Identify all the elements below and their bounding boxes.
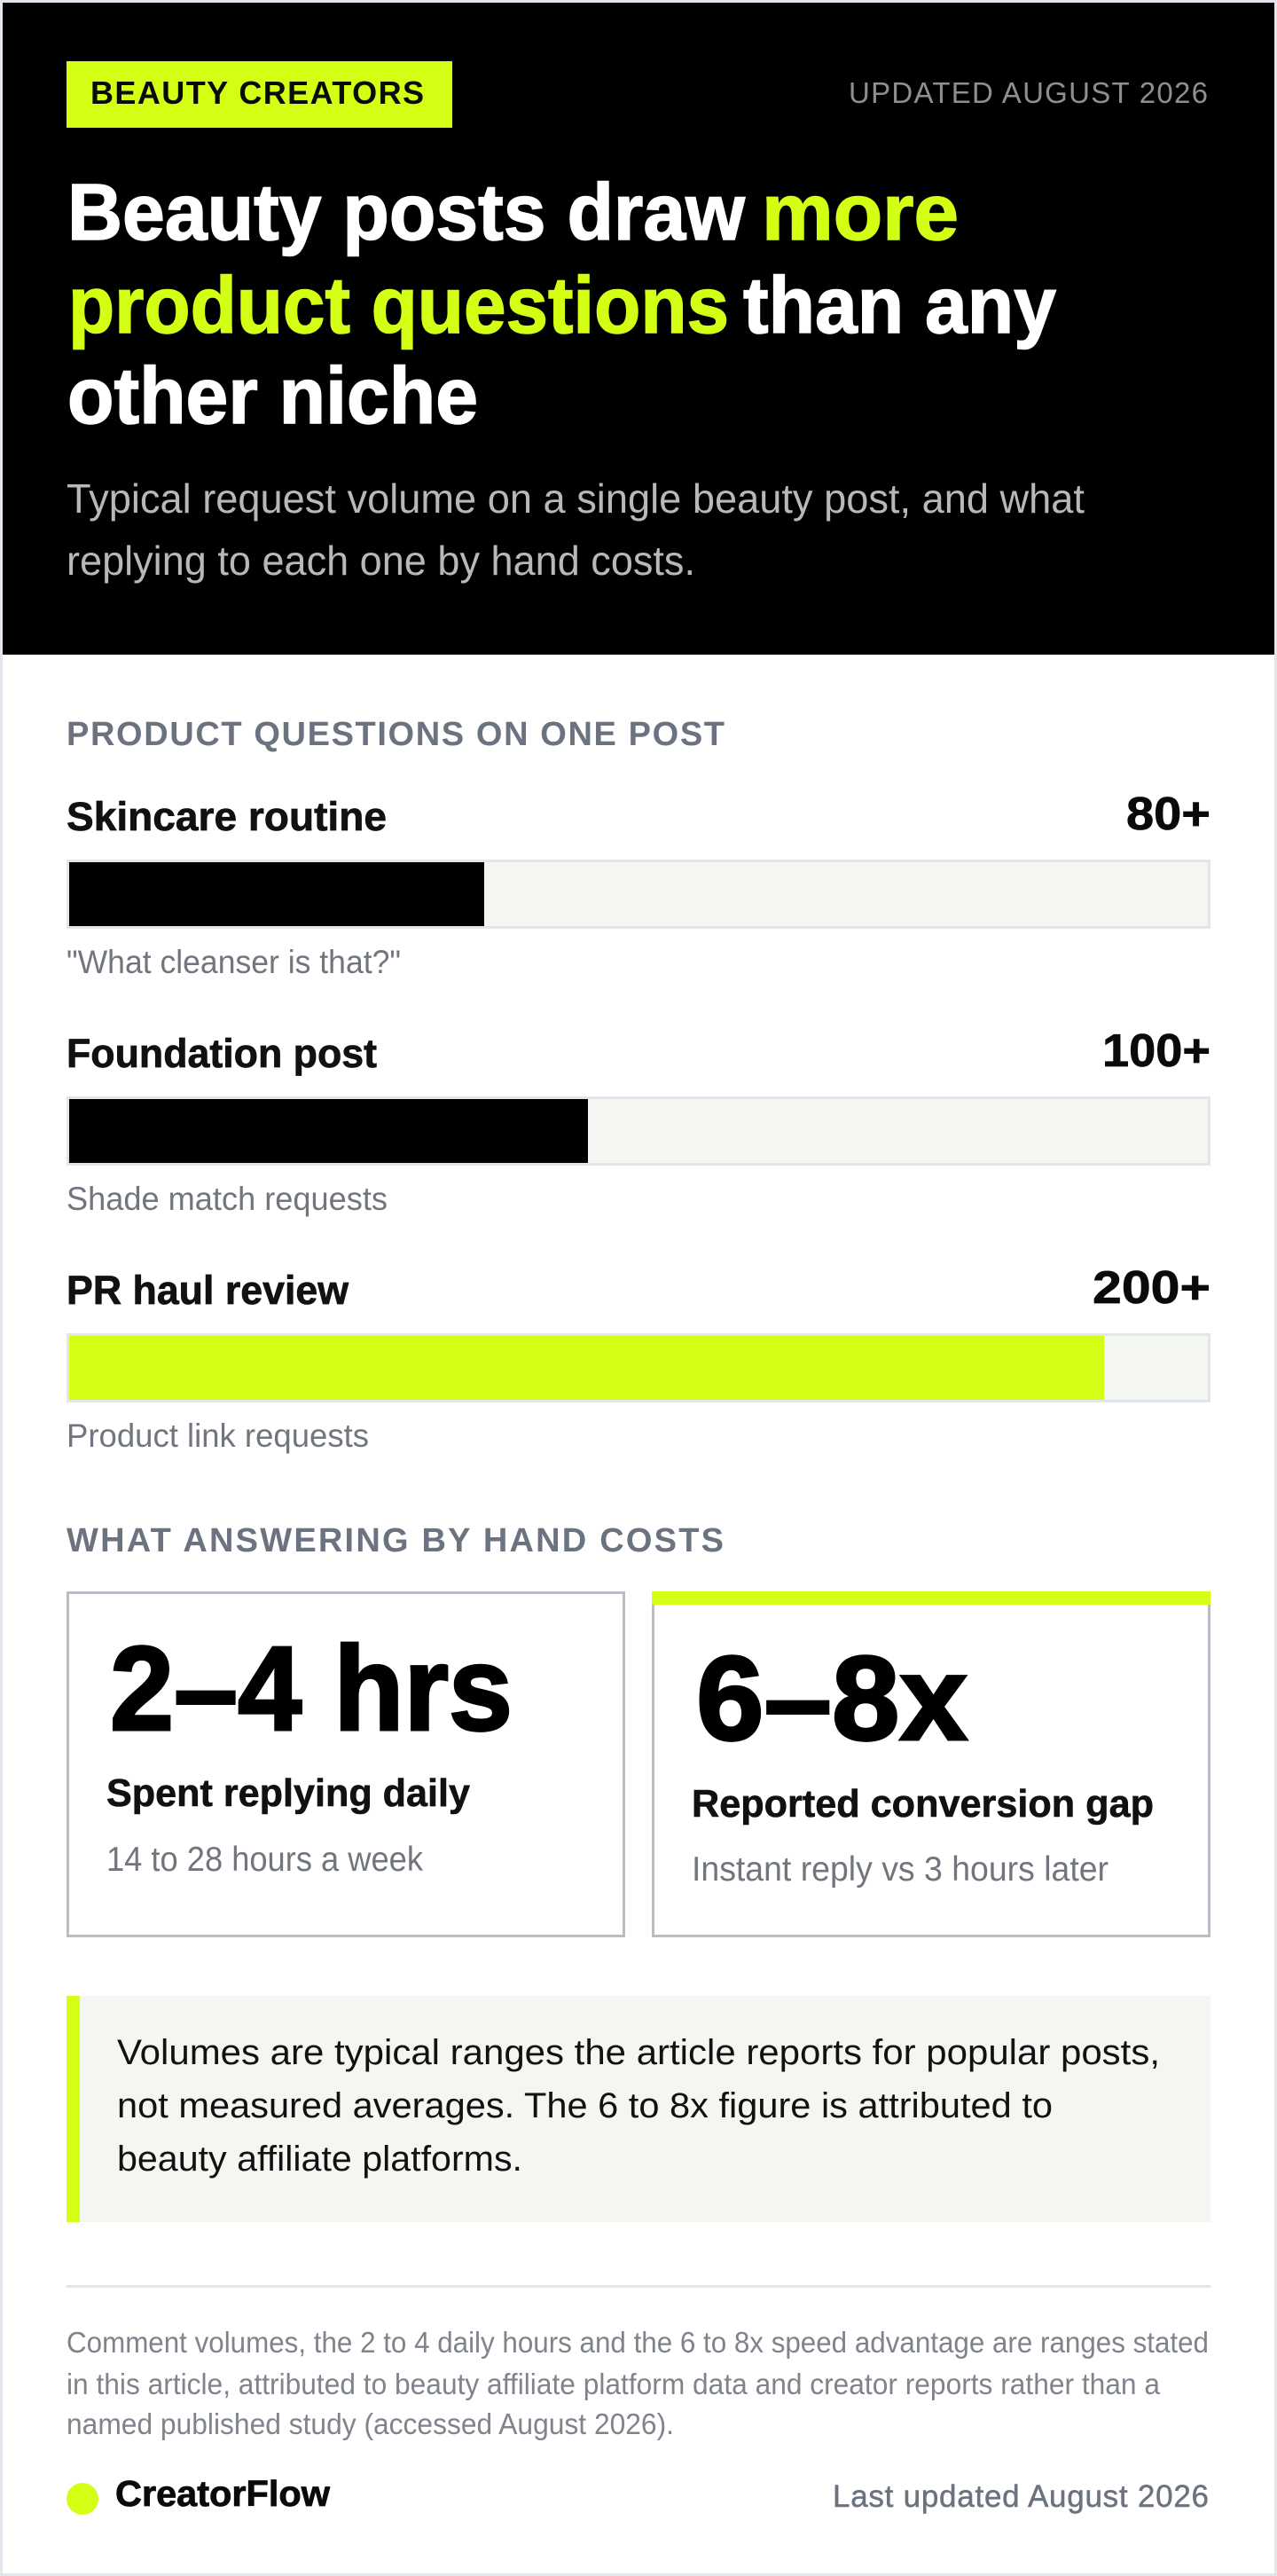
category tag: BEAUTY CREATORS bbox=[90, 75, 424, 111]
bar row: skincare routine bbox=[67, 789, 1210, 980]
stat card: hours: 14 to 28 hours a week bbox=[106, 1841, 423, 1879]
callout note: not measured averages. The 6 to 8x figure is attributed to bbox=[117, 2086, 1053, 2125]
stat card: conversion gap: 6–8x bbox=[696, 1631, 968, 1765]
stat card: hours: Spent replying daily bbox=[106, 1771, 471, 1815]
bar row: foundation post: Foundation post bbox=[67, 1031, 377, 1076]
stat card: conversion gap: Instant reply vs 3 hours later bbox=[692, 1850, 1109, 1889]
header panel bbox=[3, 3, 1274, 655]
title: than any bbox=[743, 262, 1056, 350]
bar row: skincare routine: "What cleanser is that?" bbox=[67, 944, 401, 980]
section heading: product questions: PRODUCT QUESTIONS ON ONE POST bbox=[67, 716, 725, 753]
bar row: foundation post: Shade match requests bbox=[67, 1181, 388, 1217]
callout note bbox=[67, 1996, 1210, 2222]
bar row: foundation post bbox=[67, 1025, 1210, 1217]
title: more bbox=[762, 169, 959, 257]
stat card: conversion gap: Reported conversion gap bbox=[692, 1782, 1154, 1826]
brand logo: CreatorFlow bbox=[115, 2473, 330, 2514]
bar row: PR haul review bbox=[67, 1262, 1210, 1454]
title: product questions bbox=[68, 262, 729, 350]
source footnote: named published study (accessed August 2026). bbox=[67, 2407, 674, 2440]
stat card: conversion gap bbox=[652, 1591, 1210, 1936]
callout note: beauty affiliate platforms. bbox=[117, 2140, 522, 2179]
bar row: skincare routine: Skincare routine bbox=[67, 794, 387, 839]
updated date: UPDATED AUGUST 2026 bbox=[849, 76, 1208, 109]
title: other niche bbox=[67, 352, 478, 441]
bar row: PR haul review: PR haul review bbox=[67, 1268, 349, 1313]
callout note: Volumes are typical ranges the article reports for popular posts, bbox=[117, 2033, 1160, 2072]
source footnote: in this article, attributed to beauty affiliate platform data and creator reports rather than a bbox=[67, 2368, 1161, 2400]
last updated: Last updated August 2026 bbox=[833, 2479, 1209, 2514]
subtitle: replying to each one by hand costs. bbox=[67, 538, 695, 584]
subtitle bbox=[67, 475, 1085, 584]
category tag bbox=[67, 61, 452, 128]
title bbox=[67, 169, 1056, 441]
bar row: skincare routine: 80+ bbox=[1126, 789, 1210, 840]
section heading: hand costs: WHAT ANSWERING BY HAND COSTS bbox=[67, 1522, 724, 1559]
bar row: PR haul review: Product link requests bbox=[67, 1418, 369, 1454]
source footnote: Comment volumes, the 2 to 4 daily hours and the 6 to 8x speed advantage are ranges stated bbox=[67, 2326, 1209, 2359]
subtitle: Typical request volume on a single beauty post, and what bbox=[67, 475, 1085, 522]
source footnote bbox=[67, 2326, 1209, 2440]
bar row: PR haul review: 200+ bbox=[1093, 1262, 1210, 1314]
stat card: hours bbox=[67, 1593, 624, 1936]
stat card: hours: 2–4 hrs bbox=[110, 1622, 513, 1755]
title: Beauty posts draw bbox=[67, 169, 746, 257]
bar row: foundation post: 100+ bbox=[1102, 1025, 1210, 1077]
